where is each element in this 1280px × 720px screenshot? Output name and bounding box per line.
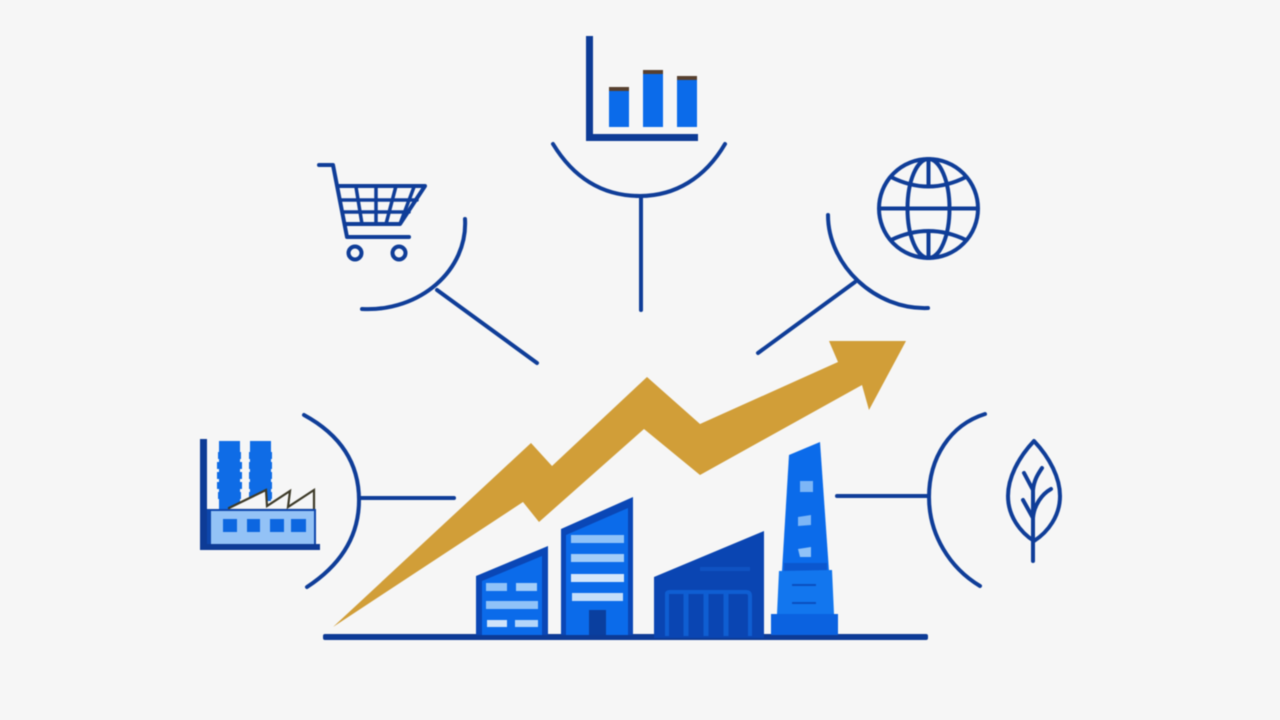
growth arrow bbox=[333, 341, 906, 627]
icon: leaf bbox=[1008, 441, 1060, 561]
icon: bar chart bbox=[586, 36, 698, 141]
cart spoke bbox=[362, 219, 537, 363]
icon: globe bbox=[879, 159, 978, 258]
bars bbox=[609, 74, 697, 127]
factory windows bbox=[223, 519, 306, 532]
building 3 bbox=[654, 531, 764, 638]
factory roof bbox=[229, 490, 314, 510]
globe spoke bbox=[758, 215, 928, 353]
building 4 tower bbox=[771, 442, 838, 635]
building 1 bbox=[476, 546, 548, 635]
factory spoke bbox=[304, 415, 454, 587]
icon: shopping cart bbox=[319, 165, 425, 260]
baseline bbox=[323, 634, 928, 640]
bar caps bbox=[609, 70, 697, 91]
building 2 bbox=[561, 497, 633, 635]
leaf spoke bbox=[837, 414, 985, 586]
chart spoke bbox=[553, 144, 725, 310]
icon: factory bbox=[200, 439, 320, 550]
factory body bbox=[207, 510, 315, 546]
chimneys bbox=[217, 441, 272, 510]
factory axes bbox=[200, 439, 320, 550]
